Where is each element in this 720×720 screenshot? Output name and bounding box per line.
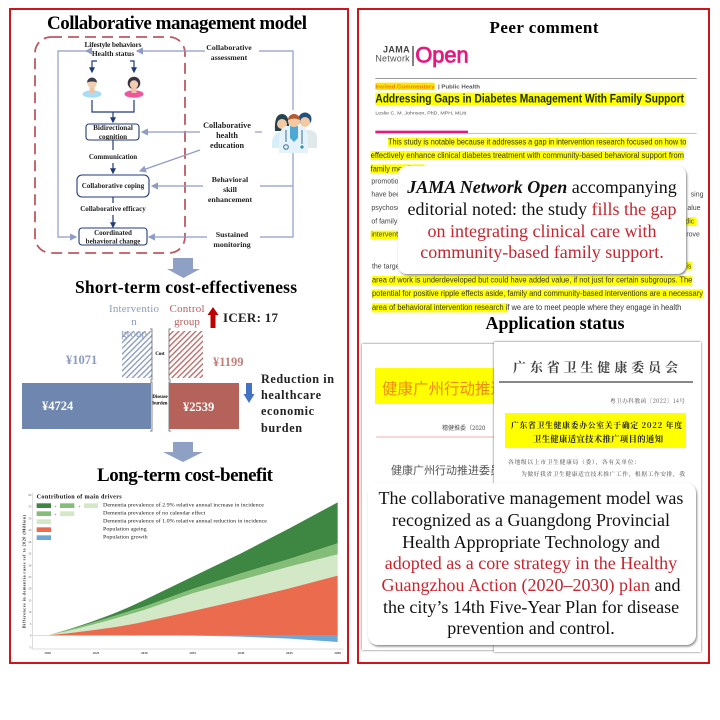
label: collaborative efficacy: Collaborative efficacy — [80, 205, 146, 213]
callout: application summary — [368, 483, 696, 645]
y tick labels: 50 — [28, 516, 32, 520]
label: sustained monitoring — [213, 230, 251, 249]
document: Healthy Guangzhou notice: 健康广州行动推进 — [382, 377, 506, 399]
y tick labels: 35 — [28, 552, 32, 556]
tag: invited commentary: Invited Commentary — [375, 84, 436, 90]
legend: + — [78, 503, 81, 508]
callout: editorial note — [398, 166, 686, 274]
logo: JAMA Network Open: Open — [415, 43, 469, 68]
body text: effectively enhance clinical diabetes treatment with community-based behavioral support from — [371, 150, 684, 160]
box: coordinated behavioral change: Coordinated — [94, 229, 132, 237]
article title: Addressing Gaps in Diabetes Management With Family Support — [375, 93, 684, 106]
y tick labels: 20 — [28, 587, 32, 591]
heading: Application status: Application status — [486, 313, 624, 333]
body text: family members. — [371, 163, 425, 173]
label: control group: Control — [170, 303, 204, 315]
heading: Peer comment: Peer comment — [490, 18, 599, 37]
label: intervention group: group — [121, 328, 147, 340]
label: lifestyle behaviors and health status: Health status — [92, 49, 134, 58]
arrow: down to short-term — [167, 258, 200, 278]
tag: invited commentary: | Public Health — [438, 84, 481, 90]
icon: red up arrow — [208, 307, 218, 328]
label: collaborative health education — [203, 121, 251, 150]
x tick labels: 2030 — [141, 651, 148, 655]
body text: This study is notable because it addresses a gap in intervention research focused on how to — [388, 137, 687, 147]
legend: Dementia prevalence of 1.0% relative annual reduction in incidence — [103, 518, 268, 525]
body text: alue — [687, 205, 701, 212]
label: reduction in healthcare economic burden — [261, 372, 334, 435]
logo: JAMA Network Open: JAMA — [383, 45, 410, 55]
logo: JAMA Network Open: Network — [375, 54, 410, 64]
chart: contribution of main drivers — [21, 493, 343, 655]
label: ICER: ICER: 17 — [223, 310, 278, 325]
document: Guangdong Health Commission notice: 广东省卫生健康委办公室关于确定 2022 年度 — [511, 420, 682, 431]
document: Healthy Guangzhou notice: 健康广州行动推进委员 — [391, 462, 501, 478]
y tick labels: 5 — [30, 622, 32, 626]
callout: editorial note: on integrating clinical care with — [428, 221, 656, 241]
axes — [33, 493, 343, 649]
heading: Long-term cost-benefit: Long-term cost-benefit — [97, 465, 274, 486]
legend: + — [54, 503, 57, 508]
value: intervention burden: ¥4724 — [42, 399, 74, 413]
value: control cost: ¥1199 — [213, 355, 244, 369]
label: behavioral skill enhancement: Behavioral — [212, 175, 249, 184]
callout: editorial note: editorial noted: the study fills the gap — [408, 199, 676, 219]
box: bidirectional cognition: Bidirectional — [93, 124, 133, 132]
x tick labels — [44, 651, 341, 655]
label: intervention group — [109, 303, 160, 340]
body text: area of behavioral intervention research if we are to meet people where they engage in health — [372, 302, 682, 312]
y tick labels — [28, 493, 32, 649]
label: sustained monitoring: Sustained — [216, 230, 249, 239]
body text: the target — [372, 263, 402, 270]
x tick labels: 2035 — [189, 651, 196, 655]
label: lifestyle behaviors and health status: Lifestyle behaviors — [84, 40, 142, 49]
logo: JAMA Network Open — [375, 43, 469, 68]
document: Guangdong Health Commission notice — [494, 342, 701, 652]
label: reduction in healthcare economic burden: economic — [261, 404, 315, 418]
icon: care team — [272, 112, 317, 153]
label: collaborative assessment: Collaborative — [206, 43, 252, 52]
y tick labels: 25 — [28, 575, 32, 579]
document: Healthy Guangzhou notice — [362, 344, 532, 650]
label: cost axis: Cost — [155, 352, 165, 357]
arrow: down to long-term — [163, 442, 203, 462]
document: Guangdong Health Commission notice: 广东省卫生健康委员会 — [513, 357, 678, 376]
heading: Collaborative management model: Collaborative management model — [47, 13, 307, 34]
callout: application summary: The collaborative management model was — [379, 488, 683, 508]
label: reduction in healthcare economic burden: Reduction in — [261, 372, 334, 386]
body text: have been — [371, 192, 404, 199]
area: population growth — [163, 635, 338, 642]
label: control group — [170, 303, 204, 328]
document: Guangdong Health Commission notice: 各地级以上市卫生健康局（委），各有关单位： — [508, 457, 640, 466]
document: Healthy Guangzhou notice: 穗健推委（2020 — [442, 423, 486, 432]
y tick labels: 15 — [28, 598, 32, 602]
callout: editorial note: community-based family support. — [420, 242, 664, 262]
body text: sing — [691, 192, 704, 199]
bar: control disease burden — [169, 383, 239, 429]
legend: Population growth — [103, 535, 148, 541]
legend: Dementia prevalence of no calendar effect — [103, 510, 206, 517]
legend: + — [54, 511, 57, 516]
legend: Population ageing — [103, 527, 147, 533]
heading: Short-term cost-effectiveness: Short-term cost-effectiveness — [75, 277, 297, 297]
document: Guangdong Health Commission notice: 粤卫办科教函〔2022〕14号 — [610, 396, 685, 405]
callout: application summary: prevention and control. — [447, 618, 615, 638]
body text: psychosocial — [371, 205, 412, 212]
label: collaborative assessment — [206, 43, 252, 62]
label: lifestyle behaviors and health status — [84, 40, 142, 58]
icon: male patient — [82, 78, 102, 98]
panel: right column — [358, 9, 709, 663]
callout: application summary: the city’s 14th Five-Year Plan for disease — [383, 597, 679, 617]
label: sustained monitoring: monitoring — [213, 240, 251, 249]
y tick labels: -5 — [29, 645, 32, 649]
x tick labels: 2050 — [334, 651, 341, 655]
y tick labels: 10 — [28, 610, 32, 614]
icon: female patient — [124, 77, 144, 98]
y tick labels: 30 — [28, 563, 32, 567]
callout: application summary: adopted as a core strategy in the Healthy — [385, 553, 677, 573]
label: intervention group: Interventio — [109, 303, 160, 315]
document: Guangdong Health Commission notice: 卫生健康适宜技术推广项目的通知 — [533, 433, 664, 445]
author: Leslie C. M. Johnson, PhD, MPH, MLitt — [375, 111, 467, 117]
box: bidirectional cognition: cognition — [99, 133, 127, 141]
box: bidirectional cognition — [86, 124, 139, 141]
axis title: Differences in dementia cases ref to 2020 (Million) — [21, 514, 26, 628]
x tick labels: 2045 — [286, 651, 293, 655]
area: population ageing — [48, 576, 338, 635]
brackets — [150, 329, 171, 431]
label: reduction in healthcare economic burden: healthcare — [261, 388, 322, 402]
box: collaborative coping: Collaborative coping — [82, 182, 145, 190]
body text: is — [686, 263, 692, 270]
legend: Contribution of main drivers — [37, 494, 122, 500]
dashed boundary — [35, 37, 185, 253]
area: mid green — [48, 543, 338, 635]
legend: Dementia prevalence of 2.9% relative annual increase in incidence — [103, 502, 265, 509]
bar: control cost — [169, 331, 203, 378]
callout: application summary: Health Appropriate Technology and — [402, 532, 660, 552]
body text: promotion — [371, 178, 403, 185]
label: collaborative health education: Collaborative — [203, 121, 251, 130]
y tick labels: 40 — [28, 540, 32, 544]
body text: intervention — [371, 232, 408, 239]
y tick labels: 0 — [30, 634, 32, 638]
area: light green — [48, 554, 338, 635]
document: Guangdong Health Commission notice: 为做好我省卫生健康适宜技术推广工作，根据工作安排，我 — [521, 469, 685, 478]
body text: rove — [686, 232, 700, 239]
y tick labels: 60 — [28, 493, 32, 497]
tag: invited commentary — [375, 83, 481, 90]
label: collaborative health education: health — [216, 131, 238, 140]
label: control group: group — [174, 316, 200, 328]
callout: editorial note: JAMA Network Open accompanying — [406, 177, 677, 197]
article: JAMA Network Open commentary — [371, 43, 704, 312]
label: disease burden axis — [152, 395, 168, 406]
icon: blue down arrow — [244, 383, 254, 403]
chart: cost and disease burden butterfly — [22, 303, 334, 435]
body text — [371, 137, 704, 312]
label: collaborative assessment: assessment — [211, 53, 248, 62]
x tick labels: 2025 — [93, 651, 100, 655]
diagram: collaborative management model — [35, 37, 317, 253]
label: communication: Communication — [89, 153, 137, 161]
callout: application summary: recognized as a Guangdong Provincial — [392, 510, 670, 530]
area: dark green — [48, 502, 338, 635]
label: intervention group: n — [131, 316, 137, 328]
y tick labels: 45 — [28, 528, 32, 532]
value: control burden: ¥2539 — [183, 400, 214, 414]
flow connectors — [92, 61, 134, 227]
label: behavioral skill enhancement: enhancement — [208, 195, 252, 204]
legend — [37, 494, 268, 541]
callout: application summary: Guangzhou Action (2020–2030) plan and — [382, 575, 680, 596]
label: reduction in healthcare economic burden: burden — [261, 421, 302, 435]
body text: area of work is underdeveloped but could have added value, if not just for certain subgroups. The — [372, 275, 693, 285]
body text: of family — [371, 218, 398, 225]
label: behavioral skill enhancement: skill — [223, 185, 238, 194]
bar: intervention disease burden — [22, 383, 151, 429]
box: coordinated behavioral change — [79, 228, 147, 246]
value: intervention cost: ¥1071 — [66, 353, 97, 367]
label: disease burden axis: burden — [153, 402, 168, 406]
label: disease burden axis: Disease — [152, 395, 168, 400]
bar: intervention cost — [122, 331, 152, 378]
panel: left column — [10, 9, 348, 663]
body text: dic — [685, 218, 695, 225]
y tick labels: 55 — [28, 505, 32, 509]
box: collaborative coping — [77, 175, 149, 197]
feedback line and arrows — [58, 51, 293, 237]
x tick labels: 2040 — [238, 651, 245, 655]
label: behavioral skill enhancement — [208, 175, 252, 204]
label: collaborative health education: education — [210, 141, 245, 150]
x tick labels: 2020 — [44, 651, 51, 655]
box: coordinated behavioral change: behavioral change — [86, 238, 140, 246]
